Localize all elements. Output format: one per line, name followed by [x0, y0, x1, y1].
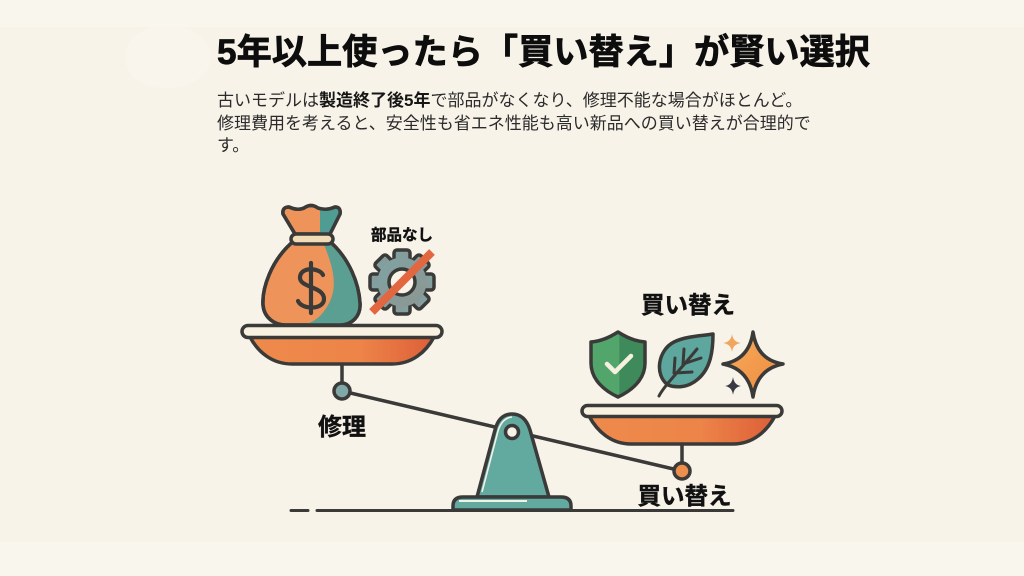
- body text: す。: [217, 136, 249, 155]
- body text: 修理費用を考えると、安全性も省エネ性能も高い新品への買い替えが合理的で: [217, 114, 811, 132]
- money bag: [263, 206, 360, 325]
- icon: crossed-out gear: [370, 250, 434, 314]
- label: parts unavailable: 部品なし: [371, 226, 433, 244]
- ground line: [291, 509, 733, 512]
- label: replacement bottom: 買い替え: [638, 483, 732, 509]
- right pan: [582, 406, 782, 444]
- icon: shield with check: [591, 332, 645, 397]
- dollar sign: [298, 263, 324, 313]
- left pan: [242, 326, 442, 364]
- body text: [217, 91, 811, 155]
- right pan group: replacement: [582, 292, 783, 509]
- left pan group: repair: [242, 206, 442, 441]
- body text: 古いモデルは製造終了後5年で部品がなくなり、修理不能な場合がほとんど。: [217, 91, 802, 110]
- icon: sparkles: [723, 332, 783, 397]
- icon: leaf: [659, 334, 713, 396]
- left stem and pivot: [334, 363, 350, 399]
- label: repair: 修理: [318, 414, 366, 441]
- right stem and pivot: [674, 443, 690, 479]
- title: 5年以上使ったら「買い替え」が賢い選択: [217, 33, 870, 72]
- fulcrum stand: [453, 414, 571, 510]
- scale beam: [342, 391, 682, 471]
- label: replacement top: 買い替え: [641, 292, 735, 318]
